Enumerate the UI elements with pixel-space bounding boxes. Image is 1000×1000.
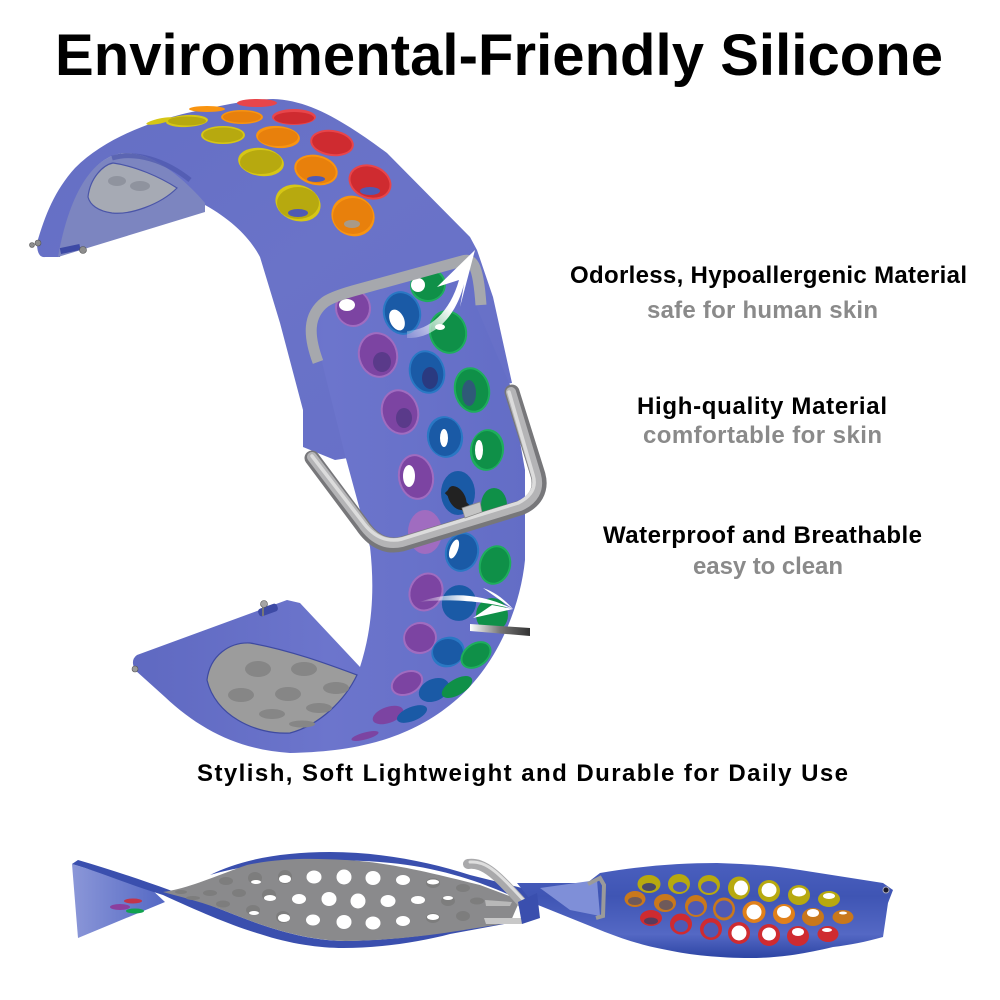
title: Environmental-Friendly Silicone — [55, 23, 943, 88]
watch band product image — [30, 99, 539, 753]
grey holes: bottom row — [186, 896, 470, 930]
feature 1: odorless: Odorless, Hypoallergenic Material — [570, 262, 967, 289]
flat holes: yellow — [638, 874, 840, 907]
breathable arrow: top — [407, 250, 475, 338]
rainbow holes: red row — [237, 99, 396, 205]
right strap light panel — [540, 880, 600, 916]
right strap section — [517, 863, 893, 958]
feature 2: quality: comfortable for skin — [643, 422, 882, 449]
upper rim — [210, 852, 545, 900]
small hole at end — [883, 887, 889, 893]
keeper trim — [588, 878, 604, 918]
arch shadow — [112, 156, 190, 180]
feature 3: waterproof — [603, 522, 922, 580]
feature 2: quality — [637, 393, 887, 449]
caption: Stylish, Soft Lightweight and Durable for Daily Use — [197, 760, 848, 787]
twisted strap rim — [72, 860, 510, 948]
breathable arrow: bottom — [420, 588, 530, 636]
feature 2: quality: High-quality Material — [637, 393, 887, 420]
flat view buckle — [468, 862, 540, 924]
grey inner side — [163, 859, 520, 941]
flat holes: orange — [624, 891, 854, 926]
underside grey dimples — [108, 176, 150, 191]
strap pin top left — [30, 240, 86, 254]
flat strap view — [72, 852, 893, 958]
flat holes: red — [640, 910, 838, 946]
grey holes: top row — [219, 870, 470, 892]
keeper loop — [311, 260, 481, 362]
feature 3: waterproof: Waterproof and Breathable — [603, 522, 922, 549]
rainbow holes: yellow row — [146, 114, 325, 227]
grey holes: middle row — [175, 889, 484, 908]
feature 3: waterproof: easy to clean — [693, 553, 843, 580]
rainbow holes: green row — [406, 264, 516, 702]
rainbow holes: blue row — [378, 287, 484, 726]
strap pin bottom — [132, 600, 279, 672]
buckle tongue — [448, 490, 482, 518]
twisted strap end — [72, 864, 165, 938]
upper strap underside — [58, 153, 205, 257]
upper strap — [37, 99, 512, 460]
rainbow holes: orange row — [189, 106, 381, 243]
underside grey panel lower — [207, 643, 357, 733]
underside grey panel — [88, 163, 177, 213]
grey panel holes — [228, 661, 349, 728]
lower strap — [133, 263, 525, 753]
buckle — [312, 392, 539, 545]
strap hole dots on twist — [110, 898, 144, 914]
feature 1: odorless: safe for human skin — [647, 297, 878, 324]
rainbow holes: purple row — [331, 285, 450, 743]
feature 1: odorless — [570, 262, 967, 324]
